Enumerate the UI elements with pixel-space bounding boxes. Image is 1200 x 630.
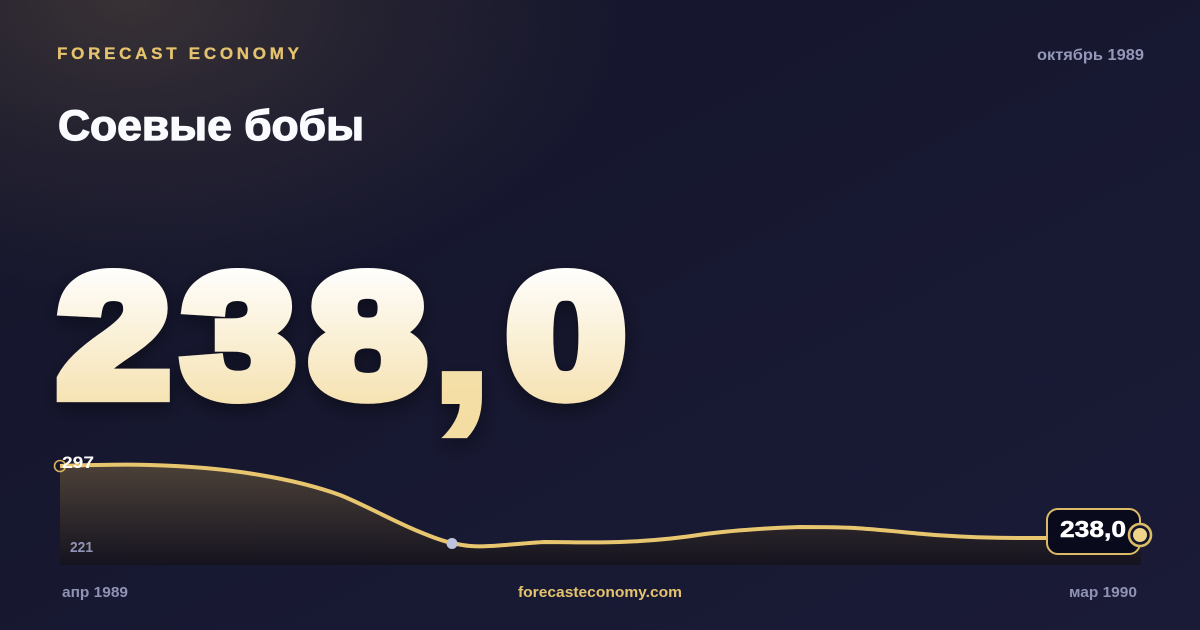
big value: , (422, 204, 501, 451)
date label: октябрь 1989 (1037, 47, 1144, 64)
chart line (60, 465, 1140, 546)
chart area fill (60, 465, 1141, 565)
start marker (54, 460, 66, 472)
big value: 2 (58, 240, 170, 432)
min label: 221 (70, 540, 93, 556)
end marker (1129, 524, 1151, 546)
big value: 0 (507, 239, 625, 431)
value badge (1047, 509, 1140, 554)
end date label: мар 1990 (1069, 584, 1137, 601)
area chart (54, 453, 1141, 565)
big value: 8 (310, 241, 425, 432)
big value (58, 204, 625, 451)
brand label: FORECAST ECONOMY (57, 44, 300, 63)
value badge: 238,0 (1060, 516, 1126, 542)
website: forecasteconomy.com (518, 584, 682, 601)
max label: 297 (62, 453, 94, 472)
title: Соевые бобы (58, 102, 364, 150)
big value: 3 (183, 240, 295, 432)
start date label: апр 1989 (62, 584, 128, 601)
mid-point dot (446, 538, 458, 549)
